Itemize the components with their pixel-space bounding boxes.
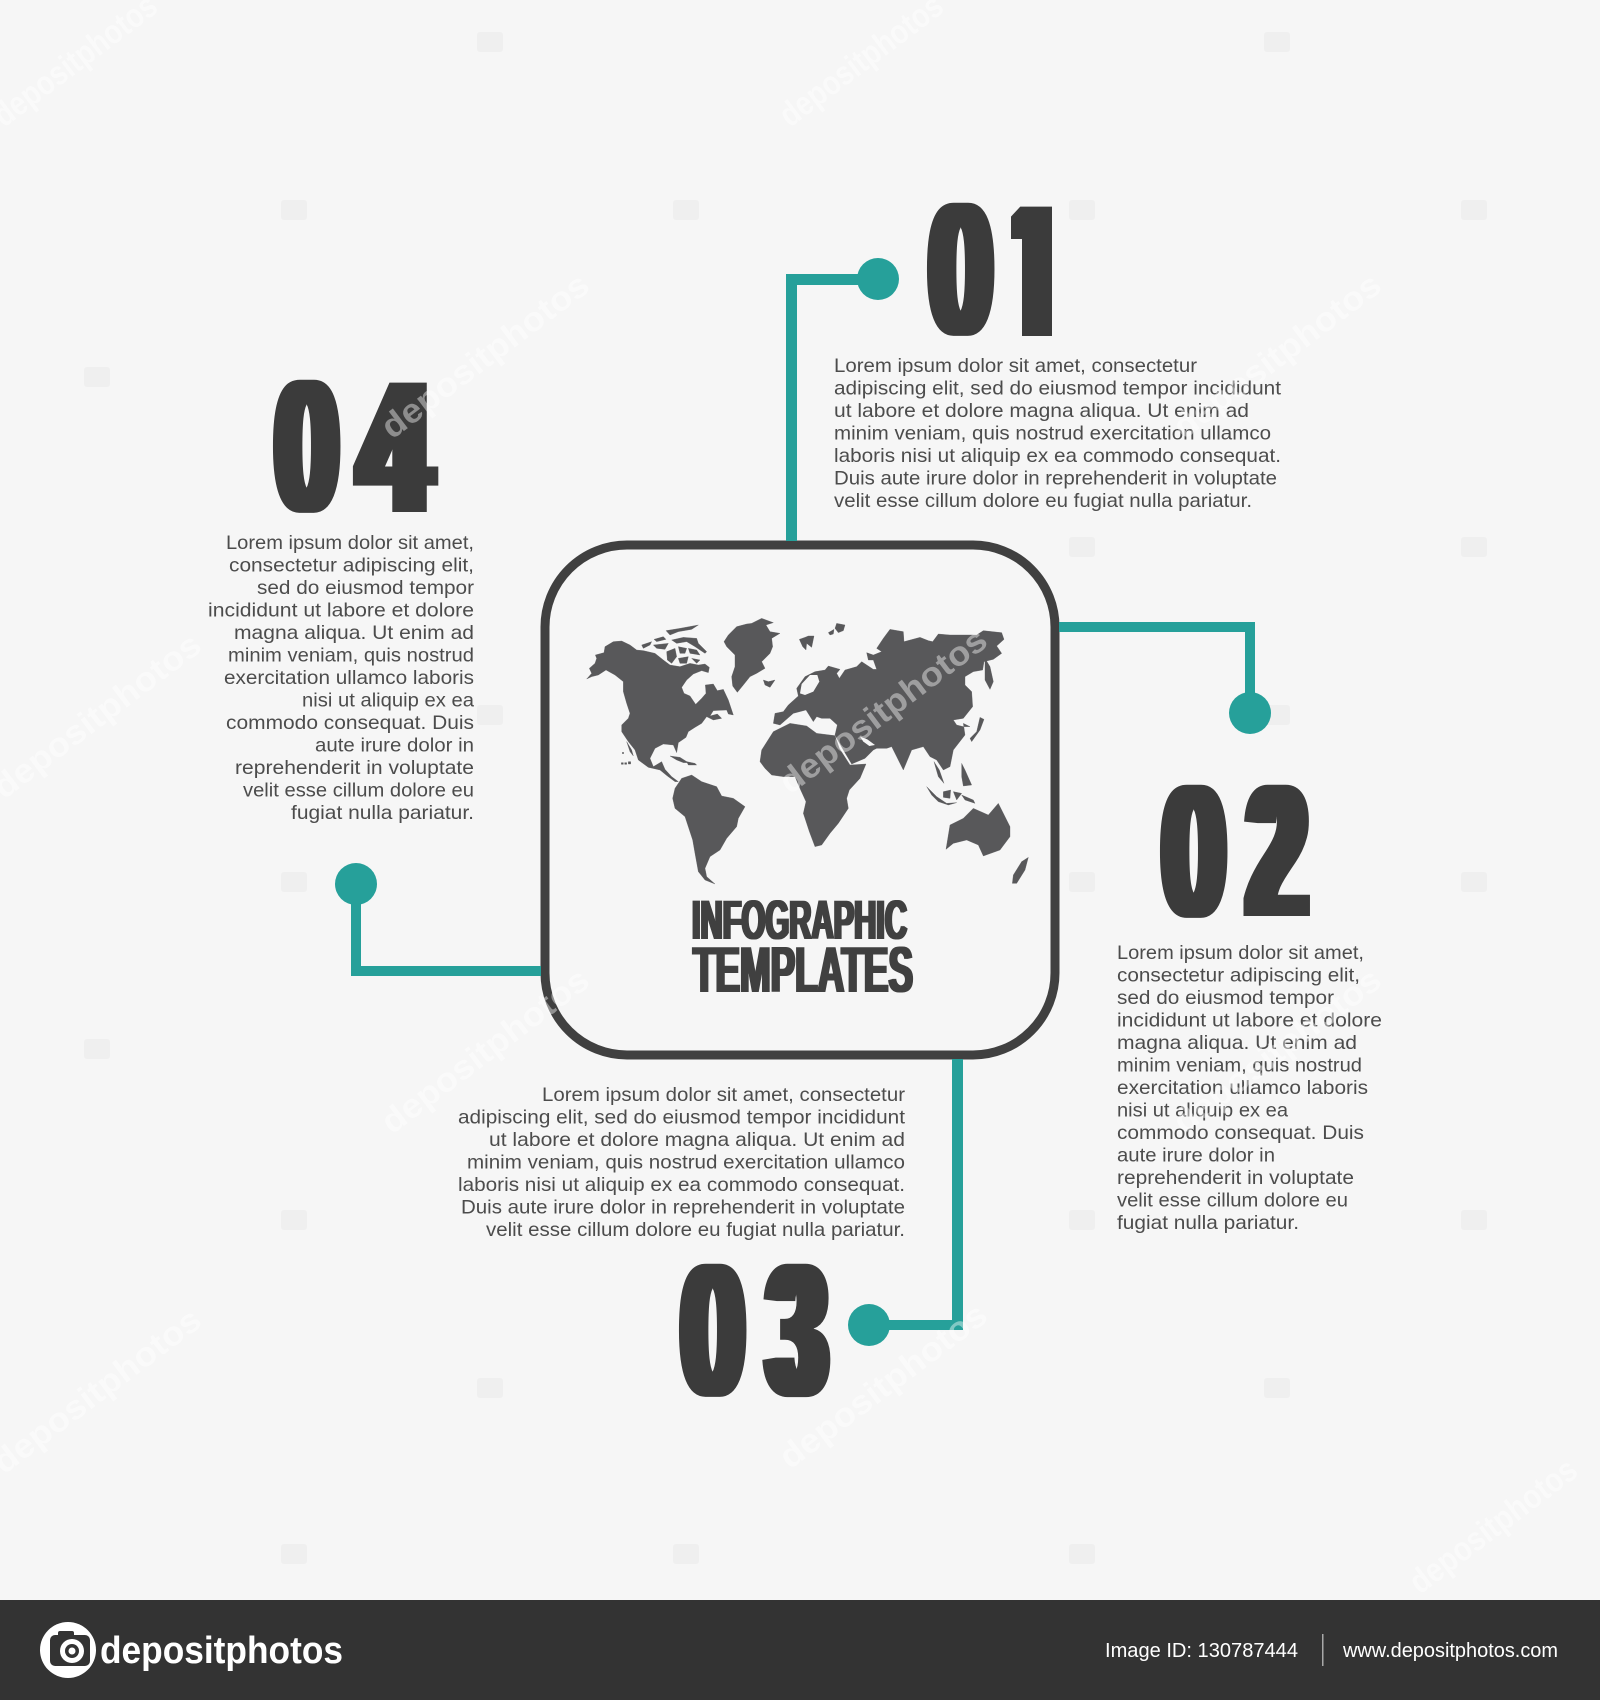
text block 04: commodo consequat. Duis <box>226 712 474 734</box>
text block 03: Lorem ipsum dolor sit amet, consectetur <box>542 1084 906 1106</box>
watermarks: depositphotos <box>1166 961 1388 1141</box>
text block 03 <box>458 1084 906 1241</box>
watermarks: depositphotos <box>1166 266 1388 446</box>
footer divider <box>1322 1634 1324 1666</box>
text block 02: Lorem ipsum dolor sit amet, <box>1117 942 1364 964</box>
number 01: 1 <box>1002 166 1065 376</box>
text block 02: reprehenderit in voluptate <box>1117 1167 1354 1189</box>
text block 03: adipiscing elit, sed do eiusmod tempor incididunt <box>458 1106 906 1128</box>
icon: camera logo <box>40 1622 96 1678</box>
logo wordmark: depositphotos <box>100 1630 343 1672</box>
title line 1: INFOGRAPHIC <box>692 888 907 951</box>
title line 2: TEMPLATES <box>693 933 913 1006</box>
text block 02: incididunt ut labore et dolore <box>1117 1010 1382 1032</box>
text block 02: nisi ut aliquip ex ea <box>1117 1100 1288 1122</box>
text block 04: velit esse cillum dolore eu <box>243 780 474 802</box>
number 01 <box>926 202 1052 336</box>
text block 01: Duis aute irure dolor in reprehenderit in voluptate <box>834 468 1277 490</box>
website url: www.depositphotos.com <box>1342 1640 1558 1662</box>
number 02: 0 <box>1162 746 1225 956</box>
text block 04: incididunt ut labore et dolore <box>208 600 474 622</box>
text block 03: laboris nisi ut aliquip ex ea commodo consequat. <box>458 1174 905 1196</box>
text block 04 <box>208 532 475 824</box>
watermarks: depositphotos <box>772 1296 994 1476</box>
world map <box>587 618 1028 884</box>
number 04: 0 <box>276 341 338 551</box>
watermarks: depositphotos <box>374 961 596 1141</box>
image id: Image ID: 130787444 <box>1105 1640 1298 1662</box>
text block 01: Lorem ipsum dolor sit amet, consectetur <box>834 355 1198 377</box>
text block 03: velit esse cillum dolore eu fugiat nulla pariatur. <box>486 1219 905 1241</box>
connector 02 <box>1059 622 1271 734</box>
number 02: 2 <box>1249 746 1305 956</box>
text block 01: adipiscing elit, sed do eiusmod tempor incididunt <box>834 378 1282 400</box>
text block 04: minim veniam, quis nostrud <box>228 644 474 666</box>
number 04 <box>276 341 430 552</box>
title <box>692 888 913 1006</box>
text block 01: laboris nisi ut aliquip ex ea commodo consequat. <box>834 445 1281 467</box>
text block 03: Duis aute irure dolor in reprehenderit in voluptate <box>461 1196 905 1218</box>
center panel: rounded square <box>545 545 1055 1055</box>
text block 01: velit esse cillum dolore eu fugiat nulla pariatur. <box>834 490 1252 512</box>
text block 04: nisi ut aliquip ex ea <box>302 690 474 712</box>
text block 02: fugiat nulla pariatur. <box>1117 1212 1299 1234</box>
text block 04: sed do eiusmod tempor <box>257 577 475 599</box>
text block 02: commodo consequat. Duis <box>1117 1122 1364 1144</box>
text block 04: aute irure dolor in <box>315 734 474 756</box>
text block 01: minim veniam, quis nostrud exercitation ullamco <box>834 422 1271 444</box>
text block 02: sed do eiusmod tempor <box>1117 987 1335 1009</box>
map: north america and greenland <box>587 618 780 782</box>
map: eurasia and islands <box>773 623 1004 805</box>
text block 01 <box>834 355 1282 512</box>
text block 02: aute irure dolor in <box>1117 1144 1275 1166</box>
text block 03: minim veniam, quis nostrud exercitation ullamco <box>467 1152 905 1174</box>
text block 01: ut labore et dolore magna aliqua. Ut enim ad <box>834 400 1249 422</box>
text block 04: consectetur adipiscing elit, <box>229 554 474 576</box>
text block 03: ut labore et dolore magna aliqua. Ut enim ad <box>489 1129 905 1151</box>
text block 04: fugiat nulla pariatur. <box>291 802 474 824</box>
watermark camera icons <box>84 32 1487 1564</box>
text block 02: magna aliqua. Ut enim ad <box>1117 1032 1357 1054</box>
map: southern continents <box>673 723 1028 884</box>
number 01: 0 <box>930 164 992 374</box>
number 04: 4 <box>360 342 430 552</box>
text block 04: magna aliqua. Ut enim ad <box>234 622 474 644</box>
number 03: 0 <box>682 1225 744 1435</box>
text block 02: consectetur adipiscing elit, <box>1117 964 1360 986</box>
footer bar <box>0 1600 1600 1700</box>
connector 03 <box>848 1059 963 1346</box>
text block 02: minim veniam, quis nostrud <box>1117 1054 1362 1076</box>
connector 04 <box>335 863 541 976</box>
text block 02: exercitation ullamco laboris <box>1117 1077 1368 1099</box>
text block 02: velit esse cillum dolore eu <box>1117 1190 1348 1212</box>
text block 04: exercitation ullamco laboris <box>224 667 474 689</box>
text block 02 <box>1117 942 1382 1234</box>
text block 04: Lorem ipsum dolor sit amet, <box>226 532 474 554</box>
number 03: 3 <box>769 1225 825 1435</box>
watermarks: depositphotos <box>374 266 596 446</box>
watermarks: depositphotos <box>772 621 994 801</box>
text block 04: reprehenderit in voluptate <box>235 757 474 779</box>
connector 01 <box>786 258 899 541</box>
